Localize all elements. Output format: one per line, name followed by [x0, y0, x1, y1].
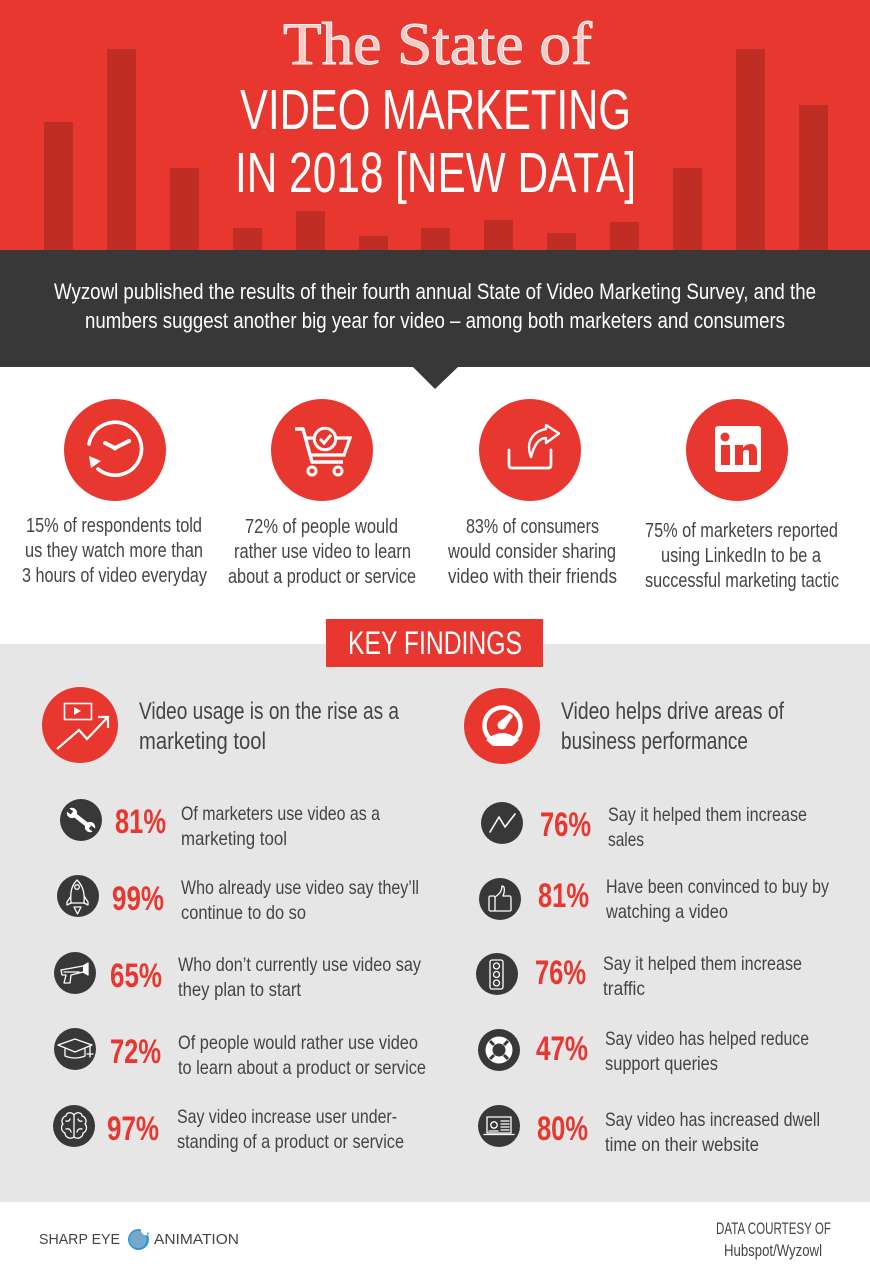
- finding: 76% sales: 76%: [540, 806, 591, 844]
- stat: watch time: 15% of respondents told: [26, 515, 202, 537]
- icon: lifebuoy: [478, 1029, 520, 1071]
- stat: sharing: would consider sharing: [447, 541, 616, 563]
- finding: 47% support: Say video has helped reduce: [605, 1028, 809, 1050]
- finding: 99% continue: Who already use video say they’ll: [181, 877, 419, 899]
- finding: 72% learn: Of people would rather use video: [178, 1032, 418, 1054]
- icon: speedometer: [464, 688, 540, 764]
- icon: wrench: [60, 799, 102, 841]
- finding: 65% plan to start: they plan to start: [178, 979, 301, 1001]
- key findings heading: KEY FINDINGS: [348, 625, 522, 661]
- data credit: Hubspot/Wyzowl: [724, 1241, 822, 1260]
- finding: 72% learn: to learn about a product or service: [178, 1057, 426, 1079]
- icon: clock: [64, 399, 166, 501]
- stat: sharing: [447, 399, 617, 588]
- column heading: video usage: Video usage is on the rise as a: [139, 698, 400, 725]
- finding: 76% sales: sales: [608, 829, 644, 851]
- key findings panel: [0, 644, 870, 1202]
- stat: learn by video: about a product or service: [228, 566, 416, 588]
- title: The State of: [283, 11, 592, 77]
- column heading: video usage: [42, 687, 400, 763]
- finding: 80% dwell time: time on their website: [605, 1134, 759, 1156]
- icon: eye logo: [128, 1225, 151, 1250]
- footer logo: ANIMATION: [154, 1231, 239, 1248]
- icon: share arrow: [479, 399, 581, 501]
- finding: 76% sales: Say it helped them increase: [608, 804, 807, 826]
- icon: gun: [54, 952, 96, 994]
- icon: brain: [53, 1105, 95, 1147]
- footer logo: SHARP EYE: [39, 1231, 120, 1248]
- finding: 65% plan to start: [54, 952, 421, 1001]
- finding: 80% dwell time: Say video has increased dwell: [605, 1109, 820, 1131]
- column heading: video usage: marketing tool: [139, 728, 266, 755]
- finding: 99% continue: [57, 875, 419, 924]
- stat: LinkedIn: [645, 399, 839, 592]
- finding: 80% dwell time: 80%: [537, 1110, 588, 1148]
- finding: 65% plan to start: 65%: [110, 957, 162, 995]
- data credit: [716, 1219, 831, 1260]
- finding: 47% support: support queries: [605, 1053, 718, 1075]
- stat: LinkedIn: using LinkedIn to be a: [661, 545, 822, 567]
- intro band: [0, 250, 870, 389]
- column heading: business performance: [464, 688, 784, 764]
- finding: 81% convinced: watching a video: [605, 901, 728, 923]
- icon: graduation cap: [54, 1028, 96, 1070]
- footer logo: [39, 1225, 239, 1250]
- stat: watch time: [22, 399, 207, 587]
- finding: 80% dwell time: [478, 1105, 820, 1156]
- icon: traffic light: [476, 953, 518, 995]
- finding: 65% plan to start: Who don’t currently use video say: [178, 954, 421, 976]
- icon: shopping cart: [271, 399, 373, 501]
- finding: 99% continue: continue to do so: [181, 902, 306, 924]
- finding: 97% understanding: [53, 1105, 404, 1153]
- finding: 81% convinced: 81%: [538, 877, 589, 915]
- finding: 97% understanding: Say video increase user under-: [177, 1106, 397, 1128]
- icon: rocket: [57, 875, 99, 917]
- finding: 47% support: 47%: [536, 1030, 588, 1068]
- stat: watch time: us they watch more than: [25, 540, 203, 562]
- finding: 76% traffic: Say it helped them increase: [603, 953, 802, 975]
- title: IN 2018 [NEW DATA]: [235, 141, 636, 205]
- icon: video trend: [42, 687, 118, 763]
- finding: 76% sales: [481, 802, 807, 851]
- stat: learn by video: rather use video to learn: [234, 541, 411, 563]
- stat: sharing: 83% of consumers: [466, 516, 599, 538]
- finding: 81% convinced: [479, 876, 829, 923]
- finding: 76% traffic: 76%: [535, 954, 586, 992]
- finding: 81% marketers: marketing tool: [181, 828, 287, 850]
- finding: 76% traffic: [476, 953, 802, 1000]
- column heading: business performance: business performance: [561, 728, 748, 755]
- finding: 97% understanding: 97%: [107, 1110, 159, 1148]
- stat: learn by video: 72% of people would: [245, 516, 398, 538]
- column heading: business performance: Video helps drive areas of: [561, 698, 784, 725]
- title: VIDEO MARKETING: [240, 78, 631, 142]
- icon: LinkedIn: [686, 399, 788, 501]
- icon: thumbs up: [479, 878, 521, 920]
- finding: 81% convinced: Have been convinced to buy by: [606, 876, 829, 898]
- stat: watch time: 3 hours of video everyday: [22, 565, 207, 587]
- finding: 97% understanding: standing of a product or service: [177, 1131, 404, 1153]
- header panel: [0, 0, 870, 250]
- stat: sharing: video with their friends: [448, 566, 617, 588]
- finding: 81% marketers: 81%: [115, 803, 166, 841]
- finding: 47% support: [478, 1028, 809, 1075]
- finding: 81% marketers: [60, 799, 380, 850]
- finding: 72% learn: [54, 1028, 426, 1079]
- background bar chart: [44, 49, 828, 250]
- finding: 99% continue: 99%: [112, 880, 164, 918]
- finding: 76% traffic: traffic: [603, 978, 645, 1000]
- finding: 81% marketers: Of marketers use video as a: [181, 803, 380, 825]
- title: [235, 11, 636, 205]
- icon: trend line: [481, 802, 523, 844]
- key findings heading: [326, 619, 543, 667]
- finding: 72% learn: 72%: [110, 1033, 161, 1071]
- stat: learn by video: [228, 399, 416, 588]
- icon: laptop: [478, 1105, 520, 1147]
